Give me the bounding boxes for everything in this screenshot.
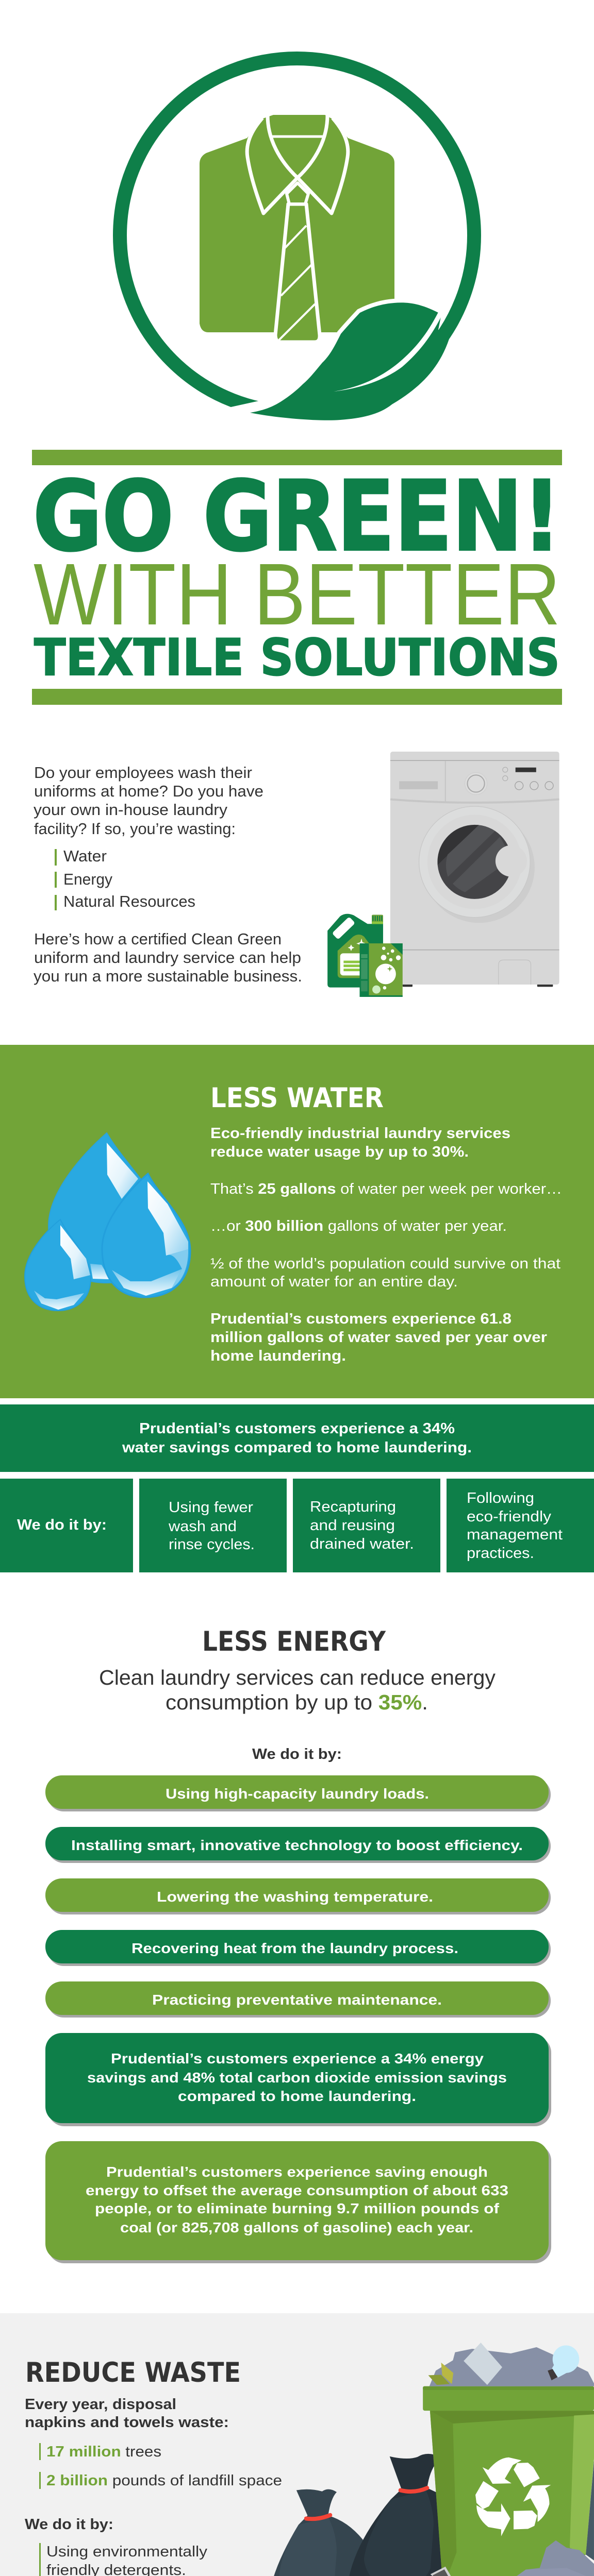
leaf	[231, 302, 449, 428]
callout: energy offset: energy to offset the average consumption of about 633	[86, 2182, 508, 2198]
method: detergents: Using environmentally	[46, 2544, 208, 2560]
intro text: uniform and laundry service can help	[34, 948, 301, 967]
intro text: uniforms at home? Do you have	[34, 782, 263, 800]
waste facts intro	[25, 2396, 229, 2431]
pill: smart technology	[45, 1827, 551, 1863]
cell: recapturing water: Recapturing	[310, 1499, 396, 1515]
emblem ring	[120, 59, 474, 412]
pill: lower temperature	[45, 1878, 551, 1914]
method: detergents	[39, 2543, 208, 2576]
pill: high-capacity loads	[45, 1775, 551, 1811]
icon: detergent box	[360, 943, 403, 997]
label: we do it by: We do it by:	[25, 2516, 113, 2533]
callout: energy offset: Prudential’s customers experience saving enough	[106, 2164, 488, 2180]
panel: less energy	[45, 1626, 551, 2263]
intro text: Do your employees wash their	[34, 764, 252, 782]
wasted resources list: Natural Resources	[63, 892, 195, 910]
cell: recapturing water: drained water.	[310, 1536, 414, 1552]
water facts text: ½ of the world’s population could survive on that	[210, 1256, 560, 1272]
cell: management practices	[447, 1479, 594, 1572]
necktie	[275, 183, 320, 342]
water facts text: Eco-friendly industrial laundry services	[210, 1125, 510, 1142]
pill: preventative maintenance: Practicing preventative maintenance.	[152, 1992, 442, 2008]
callout: 34% energy savings: compared to home laundering.	[178, 2088, 416, 2104]
label: we do it by: We do it by:	[252, 1746, 342, 1762]
cell: management practices: eco-friendly	[467, 1509, 552, 1525]
water facts text: …or 300 billion gallons of water per year.	[210, 1218, 507, 1234]
cell: fewer cycles	[139, 1479, 287, 1572]
garbage bags	[268, 2454, 444, 2576]
water facts text: amount of water for an entire day.	[210, 1274, 458, 1290]
icon: washing machine	[390, 752, 559, 987]
trash pile	[282, 2540, 594, 2576]
pill: lower temperature: Lowering the washing temperature.	[157, 1889, 433, 1905]
cell: we do it by: We do it by:	[17, 1517, 107, 1533]
recycling bin	[423, 2386, 594, 2576]
icon: recycling symbol	[475, 2458, 551, 2536]
garbage on top of bin	[428, 2343, 594, 2386]
icon: detergent bottle	[327, 914, 383, 988]
waste facts intro: Every year, disposal	[25, 2396, 176, 2413]
wasted resources list	[55, 847, 195, 910]
title: textile solutions: TEXTILE SOLUTIONS	[34, 629, 560, 687]
callout: 34% energy savings: savings and 48% total carbon dioxide emission savings	[87, 2070, 507, 2086]
intro text: Here’s how a certified Clean Green	[34, 930, 282, 948]
panel: reduce waste	[0, 2313, 594, 2576]
pill: heat recovery: Recovering heat from the laundry process.	[131, 1940, 458, 1956]
water facts text: million gallons of water saved per year over	[210, 1329, 547, 1346]
pill: smart technology: Installing smart, innovative technology to boost efficiency.	[71, 1837, 523, 1853]
callout: energy offset	[45, 2141, 551, 2263]
callout: 34% energy savings	[45, 2033, 551, 2126]
energy reduction text: Clean laundry services can reduce energy	[99, 1666, 496, 1689]
title block	[32, 450, 562, 705]
callout: energy offset: coal (or 825,708 gallons of gasoline) each year.	[120, 2219, 473, 2235]
cell: recapturing water: and reusing	[310, 1517, 395, 1534]
icon: water drops	[25, 1133, 190, 1311]
intro text: your own in-house laundry	[34, 801, 228, 819]
fact: 2 billion pounds: 2 billion pounds of landfill space	[46, 2472, 282, 2489]
litter items	[355, 2567, 588, 2576]
pill: heat recovery	[45, 1930, 551, 1966]
cell: fewer cycles: wash and	[168, 1518, 237, 1535]
banner: 34% water savings: Prudential’s customers experience a 34%	[139, 1420, 455, 1437]
water facts text: That’s 25 gallons of water per week per worker…	[210, 1181, 562, 1197]
fact: 17 million trees: 17 million trees	[46, 2444, 161, 2460]
cell: management practices: management	[467, 1527, 563, 1543]
cell: fewer cycles: rinse cycles.	[169, 1536, 255, 1553]
wasted resources list: Energy	[63, 870, 112, 888]
water facts text: Prudential’s customers experience 61.8	[210, 1311, 512, 1327]
shirt	[200, 115, 394, 332]
banner: 34% water savings: water savings compared to home laundering.	[122, 1439, 472, 1456]
waste facts intro: napkins and towels waste:	[25, 2414, 229, 2431]
pill: high-capacity loads: Using high-capacity laundry loads.	[166, 1786, 429, 1802]
wasted resources list: Water	[63, 847, 107, 865]
callout: energy offset: people, or to eliminate burning 9.7 million pounds of	[95, 2200, 500, 2216]
cell: recapturing water	[293, 1479, 440, 1572]
cell: fewer cycles: Using fewer	[169, 1499, 253, 1516]
heading: reduce waste: REDUCE WASTE	[25, 2357, 241, 2388]
callout: 34% energy savings: Prudential’s customers experience a 34% energy	[111, 2050, 484, 2066]
banner: 34% water savings	[0, 1404, 594, 1472]
water methods row	[0, 1479, 594, 1572]
cell: management practices: Following	[467, 1490, 534, 1506]
hero emblem: shirt, tie and leaf in a ring	[120, 59, 474, 428]
energy reduction text	[99, 1666, 496, 1714]
intro text: you run a more sustainable business.	[34, 967, 302, 985]
intro text: facility? If so, you’re wasting:	[34, 820, 236, 838]
heading: less energy: LESS ENERGY	[202, 1626, 386, 1657]
water facts text: reduce water usage by up to 30%.	[210, 1144, 469, 1160]
energy reduction text: consumption by up to 35%.	[166, 1690, 428, 1714]
cell: we do it by	[0, 1479, 133, 1572]
icon: washing machine and detergent	[327, 752, 559, 997]
pill: preventative maintenance	[45, 1981, 551, 2018]
illustration: recycling bin and garbage	[268, 2343, 594, 2576]
cell: management practices: practices.	[467, 1545, 534, 1562]
water facts text	[210, 1125, 562, 1364]
panel: less water	[0, 1045, 594, 1398]
heading: less water: LESS WATER	[210, 1082, 384, 1114]
water facts text: home laundering.	[210, 1348, 346, 1364]
intro text	[34, 764, 302, 985]
